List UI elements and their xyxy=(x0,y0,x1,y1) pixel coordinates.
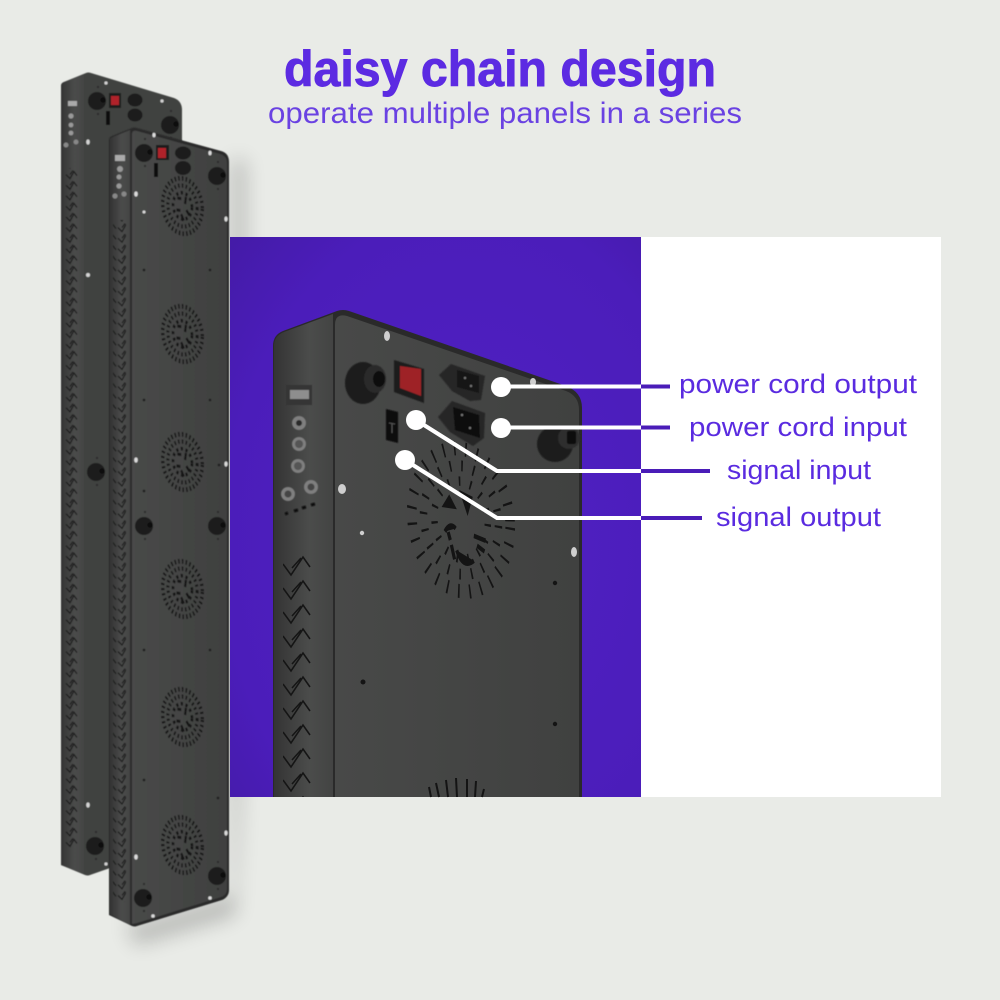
front panel (small) xyxy=(109,128,229,926)
rear panel controls xyxy=(64,86,179,148)
left knob xyxy=(345,362,386,404)
callout: signal input xyxy=(406,410,872,485)
right knob xyxy=(537,426,580,462)
signal port xyxy=(386,409,398,443)
rear panel knobs xyxy=(86,457,105,860)
power socket input xyxy=(438,401,485,446)
callout: power cord output xyxy=(491,369,918,399)
power socket output xyxy=(439,364,485,401)
callout: signal output xyxy=(395,450,882,532)
callout: power cord input: power cord input xyxy=(689,412,908,442)
rear panel screws xyxy=(86,81,164,866)
callout: signal input: signal input xyxy=(727,455,872,485)
bottom fan vent partial xyxy=(429,778,484,797)
title: daisy chain design xyxy=(284,41,716,97)
side vent pattern xyxy=(283,555,313,797)
front panel controls xyxy=(112,138,191,199)
white callout panel xyxy=(641,237,941,797)
front panel knobs xyxy=(134,161,226,912)
purple photo panel xyxy=(230,237,641,797)
rear panel (small) xyxy=(61,72,182,876)
front panel fan vents xyxy=(163,175,202,876)
subtitle: operate multiple panels in a series xyxy=(268,97,742,130)
large fan vent xyxy=(412,441,510,599)
callout: power cord output: power cord output xyxy=(679,369,918,399)
front panel holes xyxy=(143,269,220,799)
front panel shadow xyxy=(125,160,245,945)
enlarged device close-up xyxy=(273,310,582,797)
callout: signal output: signal output xyxy=(716,502,882,532)
mounting holes xyxy=(360,581,557,726)
front panel screws xyxy=(134,133,228,918)
red switch xyxy=(394,360,424,403)
callout: power cord input xyxy=(491,412,908,442)
screws xyxy=(338,331,577,557)
side display and buttons xyxy=(281,385,318,514)
